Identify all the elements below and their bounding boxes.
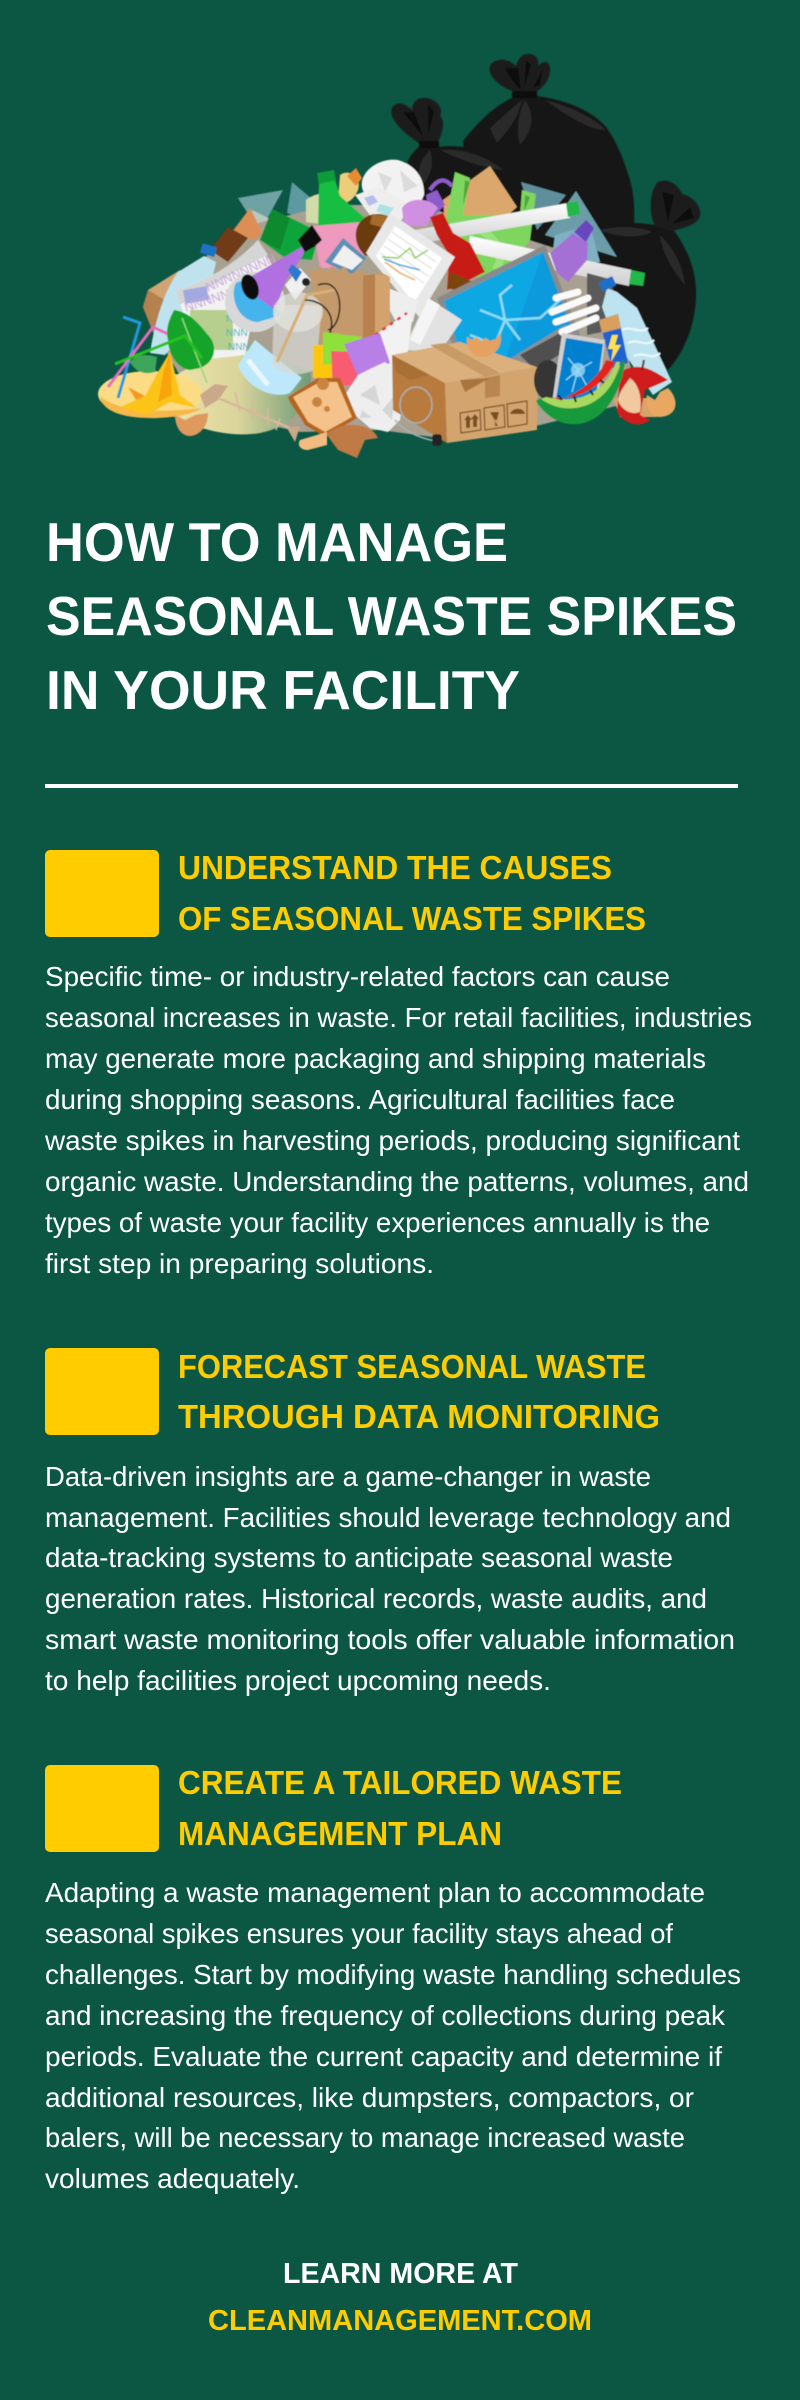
phone with cracked screen	[552, 333, 605, 408]
text block: section 3: seasonal spikes ensures your facility stays ahead of	[45, 1918, 673, 1949]
text block: section 3: and increasing the frequency of collections during peak	[45, 2000, 726, 2031]
banana peel	[120, 352, 197, 415]
heading: section 3: MANAGEMENT PLAN	[178, 1815, 502, 1852]
green glass bottle tilted	[260, 209, 320, 260]
newspaper	[175, 240, 278, 360]
brown bottle neck	[447, 272, 487, 297]
chart document	[366, 213, 455, 322]
right black garbage bag	[590, 181, 700, 370]
heading: section 3	[178, 1764, 622, 1852]
left black garbage bag	[391, 98, 523, 260]
newspaper: NNNNNNNN	[203, 250, 278, 295]
text block: section 1	[44, 961, 752, 1279]
text block: section 3: periods. Evaluate the current capacity and determine if	[45, 2041, 722, 2072]
watermelon slice	[536, 360, 625, 424]
fluorescent tube two	[468, 236, 645, 286]
icon placeholder: section 1	[45, 850, 159, 937]
panel: create a tailored plan	[45, 1764, 741, 2194]
pale plastic bottle	[306, 168, 362, 225]
heading: section 1: OF SEASONAL WASTE SPIKES	[178, 900, 646, 937]
text block: section 3	[45, 1877, 741, 2194]
battery	[599, 314, 628, 368]
sticky notes	[313, 313, 412, 387]
text block: section 3: challenges. Start by modifying waste handling schedules	[45, 1959, 741, 1990]
text block: section 2: Data-driven insights are a game-changer in waste	[45, 1461, 651, 1492]
title: SEASONAL WASTE SPIKES	[46, 585, 737, 647]
pink box	[313, 222, 370, 268]
panel: understand the causes	[44, 849, 752, 1279]
newspaper: NNN	[226, 328, 248, 339]
cardboard behind bag	[443, 166, 517, 240]
text block: section 3: balers, will be necessary to manage increased waste	[45, 2122, 685, 2153]
keyboard	[325, 238, 366, 275]
egg shell on box	[467, 333, 501, 357]
text block: section 2	[45, 1461, 735, 1696]
paper notes	[355, 187, 412, 222]
small leaf	[130, 355, 157, 373]
text block: section 3: additional resources, like dumpsters, compactors, or	[45, 2082, 694, 2113]
backing mass of mixed rubbish	[165, 205, 640, 438]
title: IN YOUR FACILITY	[46, 659, 520, 721]
newspaper: NNN	[228, 342, 250, 353]
pump bottle purple	[402, 180, 452, 226]
fluorescent tube one	[415, 201, 580, 244]
text block: section 1: may generate more packaging and shipping materials	[45, 1043, 706, 1074]
water bottle right	[599, 276, 672, 395]
white cup	[403, 298, 462, 352]
text block: section 1: seasonal increases in waste. For retail facilities, industries	[45, 1002, 752, 1033]
footer call to action	[208, 2258, 592, 2337]
panel: forecast seasonal waste	[45, 1348, 735, 1696]
text block: section 1: organic waste. Understanding the patterns, volumes, and	[45, 1166, 749, 1197]
cardboard box	[392, 342, 537, 443]
egg shell bottom	[175, 413, 208, 436]
hair dryer	[225, 225, 322, 332]
glass shards	[238, 182, 617, 272]
footer call to action: LEARN MORE AT	[283, 2258, 518, 2290]
title: HOW TO MANAGE	[46, 511, 508, 573]
toast bread	[288, 378, 357, 437]
big green leaf	[115, 310, 214, 383]
green glass bottle upright	[317, 170, 367, 232]
straw hat and plate	[98, 350, 311, 434]
compact fluorescent bulb	[552, 292, 596, 332]
icon placeholder: section 3	[45, 1765, 159, 1852]
red bottle	[430, 213, 485, 290]
text block: section 1: first step in preparing solutions.	[45, 1248, 434, 1279]
crumpled paper lower	[345, 362, 403, 432]
paper bag	[309, 266, 390, 345]
heading: section 2: FORECAST SEASONAL WASTE	[178, 1348, 646, 1385]
heading: section 2	[178, 1348, 660, 1435]
heading: section 1	[178, 849, 646, 937]
footer call to action: CLEANMANAGEMENT.COM	[208, 2305, 592, 2337]
chicken bone	[299, 425, 378, 458]
plastic cup with straw	[272, 278, 340, 374]
cardboard and copper scraps	[143, 208, 262, 337]
text block: section 1: during shopping seasons. Agricultural facilities face	[45, 1084, 675, 1115]
text block: section 2: generation rates. Historical records, waste audits, and	[45, 1583, 707, 1614]
laptop with cracked screen	[437, 245, 590, 400]
title	[46, 511, 737, 721]
heading: section 1: UNDERSTAND THE CAUSES	[178, 849, 612, 886]
illustration: pile of waste	[98, 54, 700, 458]
apple core and egg shell	[613, 360, 676, 424]
newspaper: NNNNNNN	[182, 280, 249, 315]
heading: section 2: THROUGH DATA MONITORING	[178, 1398, 660, 1435]
text block: section 1: waste spikes in harvesting periods, producing significant	[44, 1125, 740, 1156]
purple bottle right	[550, 220, 594, 282]
text block: section 1: Specific time- or industry-related factors can cause	[45, 961, 670, 992]
text block: section 2: data-tracking systems to anticipate seasonal waste	[45, 1542, 673, 1573]
straws	[108, 317, 170, 398]
round black object	[534, 360, 562, 400]
text block: section 2: to help facilities project upcoming needs.	[45, 1665, 551, 1696]
blue glass cup	[238, 340, 302, 395]
water bottle left	[150, 243, 217, 355]
text block: section 3: Adapting a waste management plan to accommodate	[45, 1877, 705, 1908]
text block: section 2: smart waste monitoring tools offer valuable information	[45, 1624, 735, 1655]
cable	[395, 387, 441, 445]
brown jar	[356, 214, 388, 256]
green plastic bag	[445, 172, 536, 280]
text block: section 3: volumes adequately.	[45, 2163, 300, 2194]
newspaper: NNN	[226, 314, 248, 325]
heading: section 3: CREATE A TAILORED WASTE	[178, 1764, 622, 1801]
text block: section 2: management. Facilities should leverage technology and	[45, 1502, 731, 1533]
icon placeholder: section 2	[45, 1348, 159, 1435]
fish skeleton	[200, 384, 300, 442]
text block: section 1: types of waste your facility experiences annually is the	[45, 1207, 710, 1238]
crumpled paper top	[362, 160, 424, 215]
large black garbage bag	[463, 54, 634, 262]
dark device behind bulb	[587, 273, 613, 335]
